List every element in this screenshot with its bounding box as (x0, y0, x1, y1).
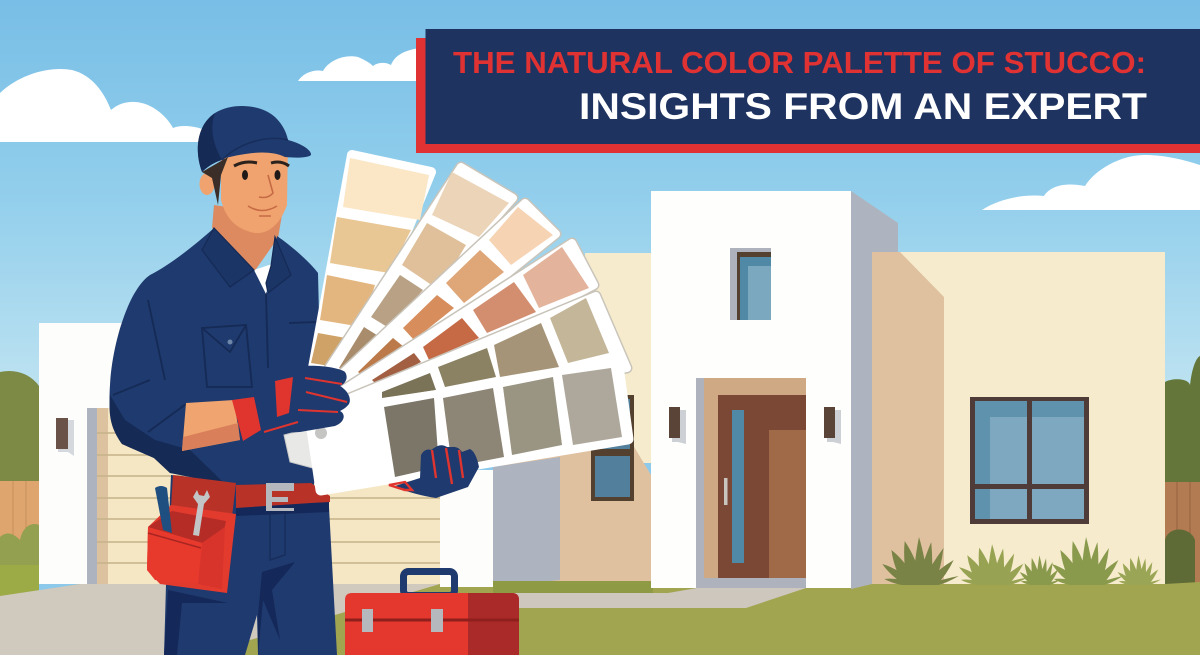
garage lamp (56, 418, 74, 456)
pouch back (171, 475, 236, 517)
neck (212, 205, 282, 272)
lawn (0, 582, 1200, 655)
nose and mouth (248, 175, 277, 216)
rivet (315, 427, 327, 439)
house: right wing (872, 252, 1165, 584)
pouch interior (148, 511, 226, 543)
fan base blades (284, 425, 322, 470)
left wing window (591, 395, 634, 501)
wrench (193, 490, 210, 536)
lawn strip and front walkway (490, 581, 806, 608)
cloud: right (982, 155, 1200, 210)
sky (0, 0, 1200, 400)
trees and fence: right (1165, 356, 1200, 584)
eyes and brows (234, 162, 289, 180)
cap (198, 106, 311, 172)
cloud: left (0, 69, 205, 142)
hair (202, 157, 228, 205)
trousers (164, 475, 337, 655)
card 6: stone grey (310, 366, 628, 490)
house: left wing (500, 253, 651, 581)
card 3: peach (330, 203, 556, 400)
fan of colour swatches (284, 155, 628, 490)
agave plants (882, 537, 1161, 585)
pouch front pocket (147, 527, 202, 583)
cloud: upper middle (298, 48, 420, 81)
toolbox (345, 572, 519, 655)
title line one: THE NATURAL COLOR PALETTE OF STUCCO: (453, 45, 1146, 80)
title line two: INSIGHTS FROM AN EXPERT (579, 86, 1147, 127)
tool belt (147, 475, 330, 593)
shirt (110, 228, 322, 495)
garage building (39, 323, 440, 584)
entry recess and door (696, 378, 806, 588)
title banner (416, 29, 1200, 153)
screwdriver (155, 486, 172, 533)
collar (202, 228, 291, 293)
house: tower side shadow (851, 191, 898, 589)
trees and fence: left (0, 371, 39, 597)
card 4: terracotta (340, 243, 594, 410)
wall lamps (669, 407, 841, 444)
card 2: beige (318, 167, 513, 390)
pouch body (147, 505, 236, 593)
card 1: warm sand (308, 155, 434, 396)
low white wall (440, 457, 560, 587)
lower glove (389, 445, 479, 498)
forearm (182, 400, 240, 451)
face (200, 140, 289, 233)
t-shirt (254, 264, 272, 294)
buckle (266, 483, 294, 511)
belt (236, 483, 330, 508)
picture window (970, 397, 1089, 524)
card 5: khaki (345, 296, 627, 420)
worker (110, 106, 337, 655)
ear (200, 173, 214, 195)
upper glove (232, 366, 350, 441)
pouch side panel (198, 527, 225, 589)
driveway (0, 584, 440, 655)
house: white tower (651, 191, 851, 588)
tower window (730, 248, 771, 320)
